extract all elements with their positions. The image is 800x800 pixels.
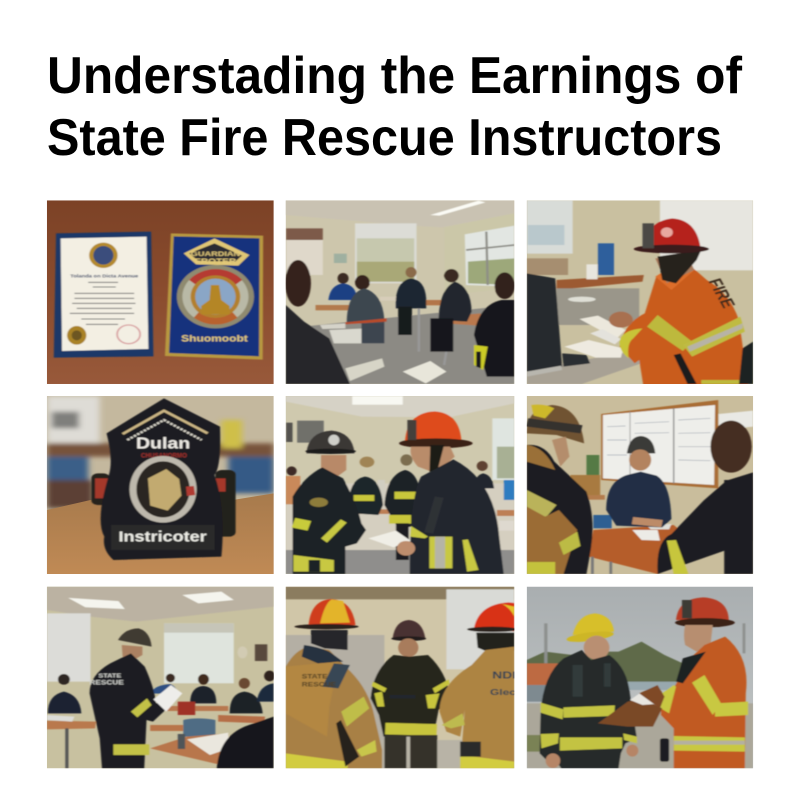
trees and building	[527, 623, 753, 768]
students	[48, 671, 275, 713]
panel: classroom discussion	[285, 200, 515, 384]
foreground person right	[657, 421, 753, 574]
photo grid	[47, 200, 753, 768]
right firefighter from behind: Glec	[490, 688, 516, 697]
left firefighter from behind: STATE	[302, 673, 328, 680]
title: Understading the Earnings of	[47, 47, 743, 105]
standing instructor: STATE	[98, 673, 122, 679]
badge plaque: Shuomoobt	[181, 334, 248, 344]
instructor right with orange helmet	[368, 411, 504, 574]
panel: three firefighters	[286, 587, 518, 768]
panel: two firefighters outdoors	[527, 587, 753, 768]
background trainees	[286, 454, 514, 560]
panel: firefighter at desk	[527, 200, 753, 403]
classroom windows	[47, 613, 234, 683]
right firefighter from behind	[440, 602, 518, 768]
badge plaque	[165, 233, 263, 360]
desks	[316, 297, 481, 383]
desk	[527, 352, 646, 384]
panel: instructors talking in classroom	[286, 396, 514, 574]
title: State Fire Rescue Instructors	[47, 109, 722, 167]
firefighter in orange coat	[609, 218, 753, 403]
computer monitor	[527, 273, 590, 377]
certificate: Tolanda on Dicta Avenue	[70, 274, 138, 279]
seated instructor	[606, 436, 671, 527]
panel: certificate and badge plaque	[47, 200, 274, 384]
patch: Dulan	[136, 434, 190, 452]
panel: instructor embroidered patch	[47, 396, 274, 574]
wooden table	[47, 493, 274, 574]
infographic canvas	[46, 56, 754, 768]
foreground firefighter left	[526, 405, 593, 574]
papers	[564, 316, 625, 358]
centre firefighter	[371, 620, 450, 768]
right firefighter from behind: NDI	[492, 669, 516, 681]
panel: instructor teaching classroom	[47, 587, 275, 768]
standing instructor	[89, 628, 182, 768]
patch	[91, 398, 236, 560]
instructor left	[292, 431, 366, 574]
left firefighter from behind: RESCUE	[302, 681, 336, 688]
row 3	[47, 587, 753, 768]
panel: whiteboard desk meeting	[526, 396, 753, 574]
left firefighter from behind	[286, 599, 382, 768]
firefighter in orange coat: FIRE	[704, 277, 739, 311]
certificate	[54, 232, 153, 358]
notice board	[286, 228, 323, 275]
badge plaque: GUARDIAN	[191, 250, 240, 258]
desks and chairs	[47, 702, 274, 768]
patch: CHUSANORMO	[141, 452, 187, 459]
badge plaque: FROTER	[195, 257, 237, 265]
table	[589, 525, 687, 574]
firefighter in orange coat	[598, 597, 748, 768]
whiteboard	[601, 400, 753, 488]
patch: Instricoter	[119, 528, 207, 545]
classroom windows	[355, 223, 514, 287]
row 2	[47, 396, 753, 574]
cabinet and shelf	[557, 243, 644, 325]
standing instructor: RESCUE	[89, 679, 124, 686]
firefighter in yellow helmet	[540, 613, 638, 768]
row 1	[47, 200, 753, 403]
title	[47, 47, 743, 167]
seated students	[285, 260, 515, 384]
